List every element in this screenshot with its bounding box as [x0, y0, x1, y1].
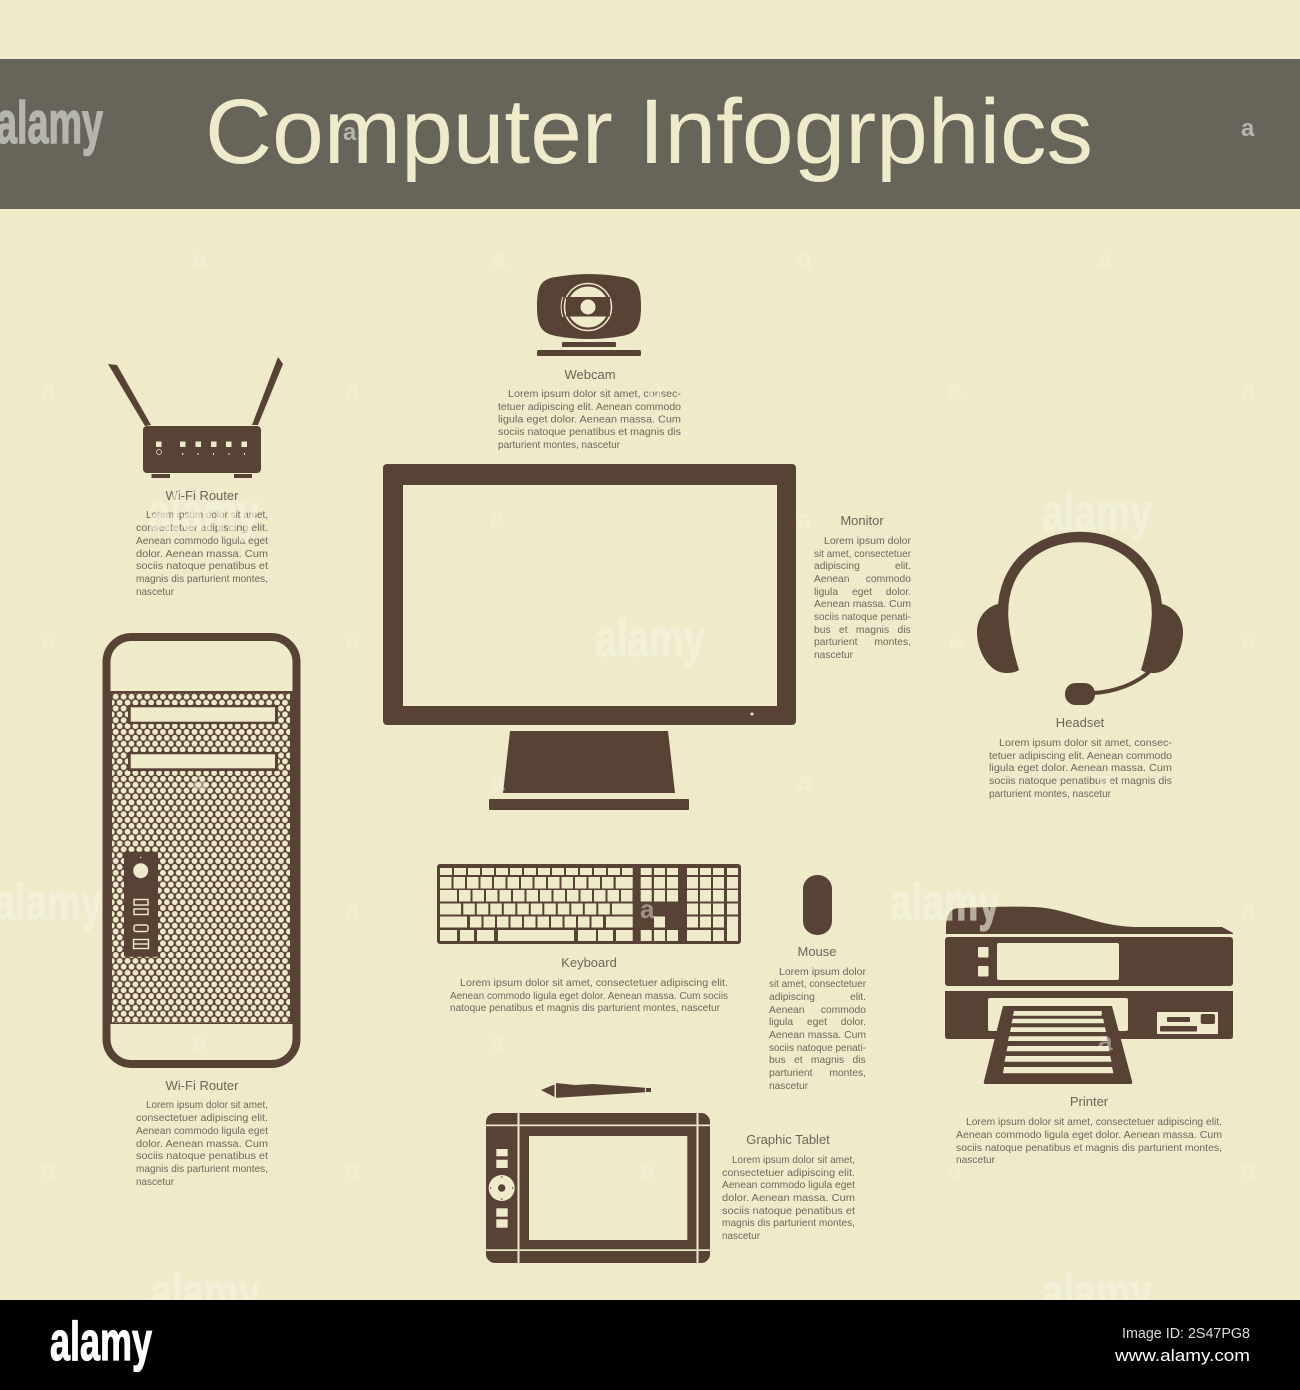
tablet caption: Lorem ipsum dolor sit amet, — [732, 1155, 855, 1166]
watermarks: a — [648, 374, 663, 404]
watermarks: a — [490, 766, 505, 796]
webcam caption: ligula eget dolor. Aenean massa. Cum — [498, 414, 681, 426]
mouse caption: sociis natoque penati- — [769, 1043, 866, 1054]
tower caption: sociis natoque penatibus et — [136, 1151, 268, 1162]
router caption: nascetur — [136, 587, 175, 598]
watermarks: alamy — [1042, 1264, 1152, 1322]
watermarks: a — [345, 894, 360, 924]
title band: a — [1241, 115, 1255, 142]
watermarks: alamy — [890, 874, 1000, 932]
watermarks: a — [1241, 1154, 1256, 1184]
keyboard caption: natoque penatibus et magnis dis parturient montes, nascetur — [450, 1003, 721, 1014]
mouse caption: nascetur — [769, 1081, 809, 1092]
keyboard caption: Lorem ipsum dolor sit amet, consectetuer adipiscing elit. — [460, 978, 728, 989]
watermarks: a — [490, 504, 505, 534]
title band: alamy — [0, 90, 103, 156]
monitor caption: dolor. — [886, 587, 911, 598]
monitor caption: montes, — [874, 637, 911, 648]
watermarks: a — [640, 894, 655, 924]
mouse caption: Lorem ipsum dolor — [779, 967, 867, 978]
monitor caption: Aenean massa. Cum — [814, 599, 911, 610]
watermarks: a — [192, 766, 207, 796]
router caption: Aenean commodo ligula eget — [136, 536, 268, 547]
monitor caption: adipiscing — [814, 561, 860, 572]
mouse caption: sit amet, consectetuer — [769, 979, 867, 990]
watermarks: alamy — [595, 610, 705, 668]
tablet caption — [722, 1132, 855, 1242]
watermarks: a — [948, 1154, 963, 1184]
mouse caption: adipiscing — [769, 992, 815, 1003]
tower caption — [136, 1078, 268, 1188]
router caption: magnis dis parturient montes, — [136, 574, 268, 585]
webcam caption — [498, 367, 681, 451]
icon: mouse — [803, 875, 832, 935]
monitor caption: Lorem ipsum dolor — [824, 536, 912, 547]
icon: headset — [977, 537, 1183, 705]
router caption: Lorem ipsum dolor sit amet, — [146, 510, 268, 521]
tablet caption: nascetur — [722, 1231, 761, 1242]
watermarks: a — [1241, 624, 1256, 654]
mouse caption: bus et magnis dis — [769, 1055, 866, 1066]
footer bar — [0, 1300, 1300, 1390]
icon: webcam — [537, 274, 641, 356]
watermarks: a — [1098, 244, 1113, 274]
router caption: dolor. Aenean massa. Cum — [136, 549, 268, 560]
monitor caption: bus et magnis dis — [814, 625, 911, 636]
webcam caption: tetuer adipiscing elit. Aenean commodo — [498, 402, 681, 413]
watermarks: a — [41, 624, 56, 654]
monitor caption: parturient — [814, 637, 858, 648]
monitor caption: commodo — [866, 574, 911, 585]
printer caption: Lorem ipsum dolor sit amet, consectetuer adipiscing elit. — [966, 1117, 1222, 1128]
webcam caption: parturient montes, nascetur — [498, 440, 621, 451]
mouse caption: Aenean massa. Cum — [769, 1030, 866, 1041]
watermarks: a — [192, 1026, 207, 1056]
footer bar: alamy — [50, 1310, 152, 1372]
router caption: sociis natoque penatibus et — [136, 561, 268, 572]
mouse caption: commodo — [821, 1005, 866, 1016]
webcam caption: sociis natoque penatibus et magnis dis — [498, 427, 681, 438]
headset caption: sociis natoque penatibus et magnis dis — [989, 776, 1172, 787]
mouse caption: dolor. — [841, 1017, 866, 1028]
router caption — [136, 488, 268, 598]
mouse caption: elit. — [850, 992, 866, 1003]
monitor caption: eget — [852, 587, 872, 598]
icon: graphic tablet — [486, 1113, 710, 1263]
monitor caption: nascetur — [814, 650, 854, 661]
watermarks: a — [797, 766, 812, 796]
tablet caption: magnis dis parturient montes, — [722, 1218, 855, 1229]
watermarks: a — [1241, 374, 1256, 404]
watermarks: a — [345, 1154, 360, 1184]
watermarks: a — [1098, 766, 1113, 796]
tablet caption: dolor. Aenean massa. Cum — [722, 1193, 855, 1204]
footer bar: www.alamy.com — [1114, 1346, 1250, 1365]
icon: stylus pen — [541, 1083, 651, 1098]
webcam caption: Webcam — [564, 367, 616, 382]
keyboard caption: Keyboard — [561, 955, 617, 970]
watermarks: a — [492, 244, 507, 274]
watermarks: a — [41, 1154, 56, 1184]
mouse caption: eget — [807, 1017, 827, 1028]
title band — [0, 59, 1300, 209]
icon: keyboard — [437, 864, 741, 944]
watermarks: a — [797, 244, 812, 274]
watermarks: a — [1098, 1026, 1113, 1056]
printer caption: sociis natoque penatibus et magnis dis parturient montes, — [956, 1143, 1222, 1154]
tablet caption: Graphic Tablet — [746, 1132, 830, 1147]
tower caption: Aenean commodo ligula eget — [136, 1126, 268, 1137]
watermarks — [0, 244, 1256, 1322]
tower caption: nascetur — [136, 1177, 175, 1188]
watermarks: alamy — [150, 1264, 260, 1322]
watermarks: a — [640, 1154, 655, 1184]
monitor caption: elit. — [895, 561, 911, 572]
monitor caption — [814, 513, 912, 661]
icon: wi-fi router — [108, 357, 283, 478]
printer caption: Printer — [1070, 1094, 1109, 1109]
icon: desktop tower — [106, 637, 296, 1064]
watermarks: a — [797, 504, 812, 534]
monitor caption: ligula — [814, 587, 838, 598]
mouse caption: montes, — [829, 1068, 866, 1079]
mouse caption: parturient — [769, 1068, 813, 1079]
tower caption: Lorem ipsum dolor sit amet, — [146, 1100, 268, 1111]
mouse caption — [769, 944, 867, 1092]
monitor caption: Aenean — [814, 574, 850, 585]
tablet caption: Aenean commodo ligula eget — [722, 1180, 855, 1191]
headset caption: parturient montes, nascetur — [989, 789, 1112, 800]
title band: a — [343, 119, 357, 146]
tablet caption: sociis natoque penatibus et — [722, 1206, 855, 1217]
keyboard caption: Aenean commodo ligula eget dolor. Aenean massa. Cum sociis — [450, 991, 728, 1002]
icon: printer — [945, 907, 1233, 1084]
tower caption: dolor. Aenean massa. Cum — [136, 1139, 268, 1150]
mouse caption: Aenean — [769, 1005, 805, 1016]
headset caption: Lorem ipsum dolor sit amet, consec- — [999, 738, 1172, 749]
webcam caption: Lorem ipsum dolor sit amet, consec- — [508, 389, 681, 400]
watermarks: alamy — [1042, 484, 1152, 542]
watermarks: a — [490, 1026, 505, 1056]
tower caption: Wi-Fi Router — [166, 1078, 239, 1093]
printer caption: Aenean commodo ligula eget dolor. Aenean massa. Cum — [956, 1130, 1222, 1141]
watermarks: a — [1241, 894, 1256, 924]
printer caption — [956, 1094, 1222, 1166]
watermarks: a — [41, 374, 56, 404]
watermarks: a — [345, 374, 360, 404]
footer bar: Image ID: 2S47PG8 — [1122, 1325, 1250, 1342]
router caption: consectetuer adipiscing elit. — [136, 523, 268, 534]
monitor caption: sociis natoque penati- — [814, 612, 911, 623]
watermarks: a — [192, 244, 207, 274]
printer caption: nascetur — [956, 1155, 996, 1166]
headset caption — [989, 715, 1172, 800]
icon: monitor — [383, 464, 796, 810]
watermarks: a — [948, 374, 963, 404]
monitor caption: sit amet, consectetuer — [814, 549, 912, 560]
watermarks: a — [948, 624, 963, 654]
mouse caption: Mouse — [797, 944, 837, 959]
tower caption: consectetuer adipiscing elit. — [136, 1113, 268, 1124]
watermarks: alamy — [149, 484, 259, 542]
mouse caption: ligula — [769, 1017, 793, 1028]
watermarks: a — [345, 624, 360, 654]
monitor caption: Monitor — [840, 513, 884, 528]
keyboard caption — [450, 955, 728, 1014]
router caption: Wi-Fi Router — [166, 488, 239, 503]
tower caption: magnis dis parturient montes, — [136, 1164, 268, 1175]
headset caption: ligula eget dolor. Aenean massa. Cum — [989, 763, 1172, 774]
headset caption: tetuer adipiscing elit. Aenean commodo — [989, 751, 1172, 762]
tablet caption: consectetuer adipiscing elit. — [722, 1168, 855, 1179]
headset caption: Headset — [1056, 715, 1105, 730]
title band: Computer Infogrphics — [205, 81, 1093, 183]
